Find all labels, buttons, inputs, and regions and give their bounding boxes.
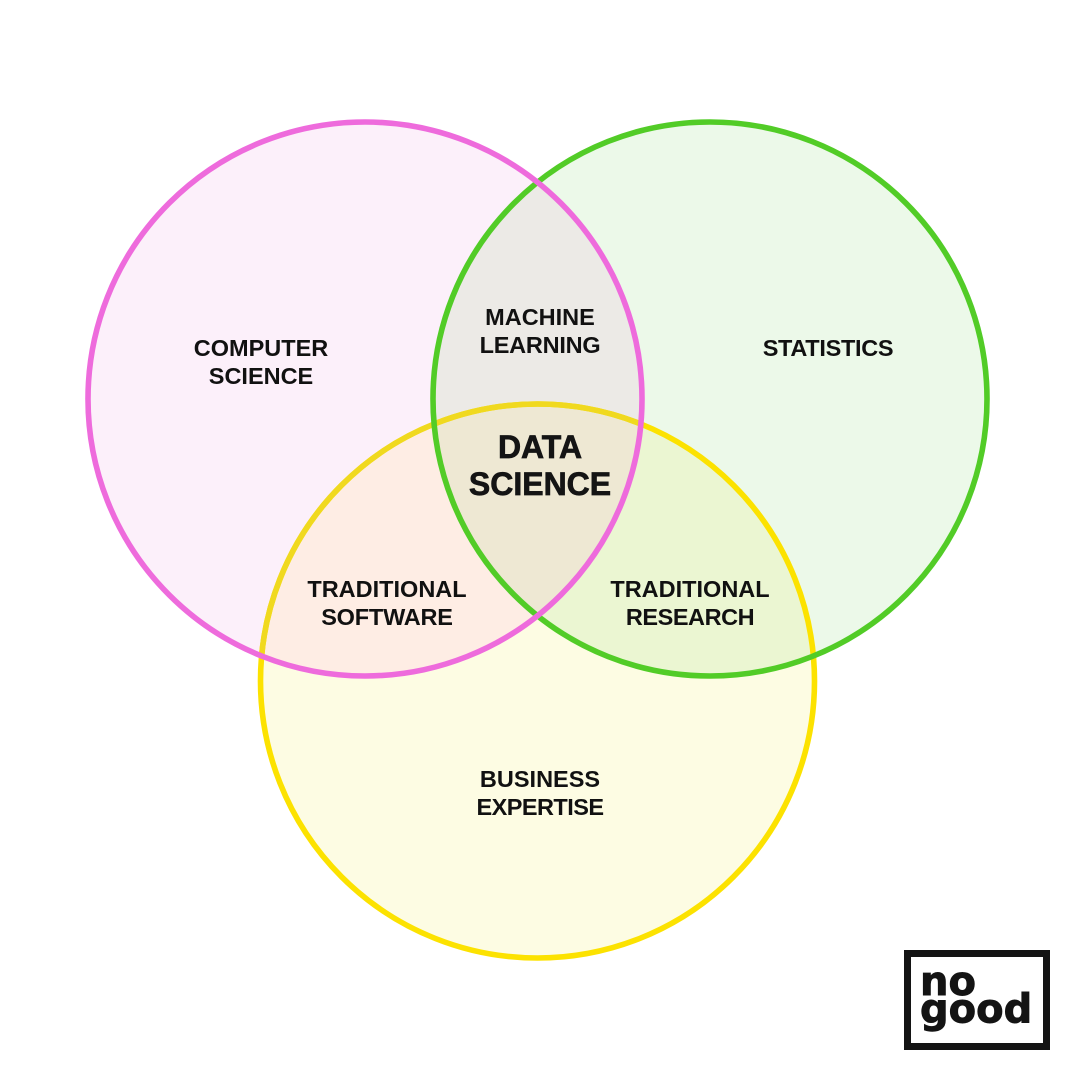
overlap: data science centre: [437, 407, 638, 612]
logo: no good: good: [920, 986, 1032, 1032]
label: computer science: SCIENCE: [209, 363, 313, 389]
circle outline: business expertise: [260, 404, 814, 958]
label: statistics: STATISTICS: [763, 335, 893, 361]
label: traditional research: RESEARCH: [626, 604, 754, 630]
label: business expertise: EXPERTISE: [477, 794, 603, 820]
label: traditional software: SOFTWARE: [321, 604, 453, 630]
overlap: traditional software: [265, 428, 533, 673]
circle outline: computer science: [88, 122, 642, 676]
overlap: machine learning: [436, 186, 639, 420]
circle fill: statistics: [433, 122, 987, 676]
circle fill: computer science: [88, 122, 642, 676]
circle outline: statistics: [433, 122, 987, 676]
label: data science: DATA: [498, 429, 582, 465]
circle outline: yellow arc inside the pink circle: [259, 401, 638, 654]
circle fill: business expertise: [260, 404, 814, 958]
logo: no good: no: [920, 959, 976, 1005]
label: data science: SCIENCE: [469, 466, 611, 502]
label: business expertise: BUSINESS: [480, 766, 600, 792]
overlap: traditional research: [542, 428, 810, 674]
label: machine learning: LEARNING: [480, 332, 600, 358]
label: traditional software: TRADITIONAL: [307, 576, 467, 602]
label: computer science: COMPUTER: [194, 335, 328, 361]
logo: no good: [908, 954, 1046, 1046]
venn diagram: [88, 122, 987, 958]
label: machine learning: MACHINE: [485, 304, 595, 330]
label: traditional research: TRADITIONAL: [610, 576, 770, 602]
